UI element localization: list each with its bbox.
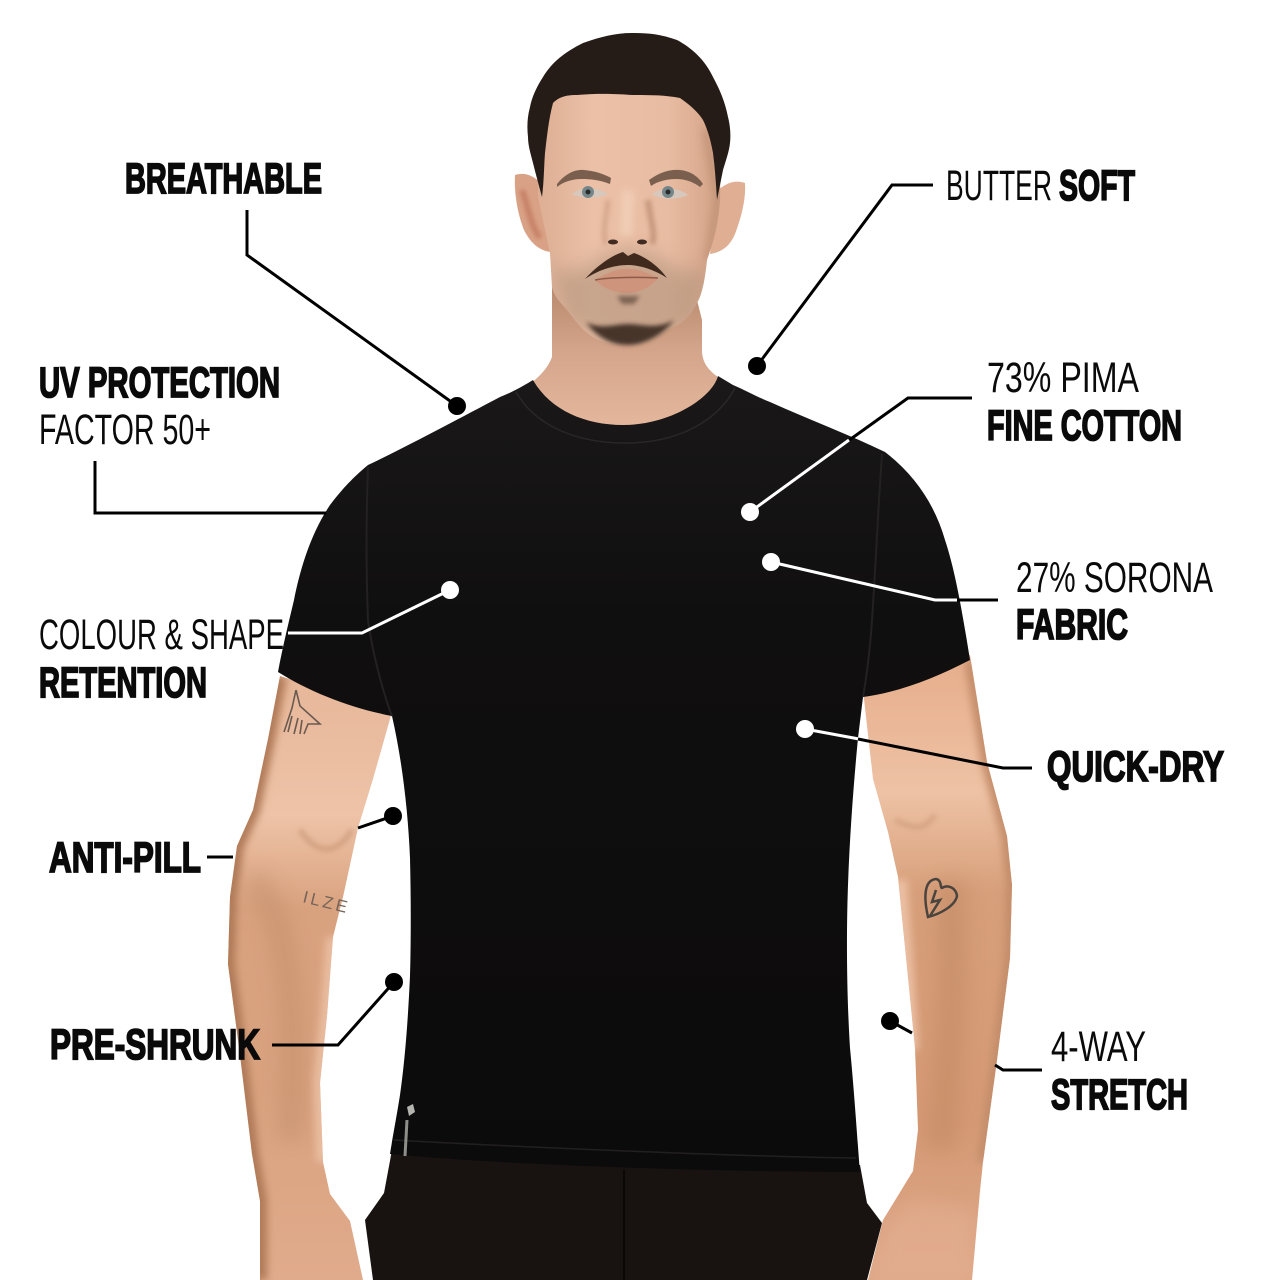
pants <box>365 1150 882 1280</box>
man photo illustration <box>220 33 1020 1280</box>
callout: sorona fabric: FABRIC <box>1016 601 1128 649</box>
callout: anti-pill: ANTI-PILL <box>49 834 201 882</box>
right arm <box>860 655 1020 1280</box>
hair <box>527 33 730 200</box>
eyebrows <box>557 170 611 187</box>
ears <box>515 174 550 252</box>
nose highlight <box>626 190 628 236</box>
tattoo: hand <box>284 690 320 734</box>
callout: sorona fabric <box>762 553 1213 649</box>
callout: UV protection <box>39 359 326 513</box>
callout: pre-shrunk: PRE-SHRUNK <box>50 1021 260 1069</box>
t-shirt <box>278 376 970 1172</box>
callout: colour and shape retention: COLOUR & SHAPE <box>39 611 284 659</box>
callout: anti-pill <box>49 807 402 882</box>
callout: UV protection: FACTOR 50+ <box>39 406 211 454</box>
soul patch <box>617 296 640 304</box>
collar rib <box>516 388 735 443</box>
callout: colour and shape retention: RETENTION <box>39 659 207 707</box>
hem logo tag <box>405 1104 415 1156</box>
sleeve seams <box>366 454 882 716</box>
callout: pima cotton: FINE COTTON <box>987 402 1182 450</box>
moustache <box>585 252 667 279</box>
temple shading <box>706 130 718 260</box>
hem stitching <box>394 1140 856 1158</box>
callout: UV protection: UV PROTECTION <box>39 359 280 407</box>
callout: butter soft <box>748 162 1135 375</box>
lips <box>595 269 658 293</box>
callout: 4-way stretch: STRETCH <box>1051 1071 1188 1119</box>
nostrils <box>608 240 647 244</box>
tattoo: broken heart <box>925 879 957 917</box>
goatee <box>586 320 674 345</box>
face <box>538 94 720 344</box>
callout: 4-way stretch: 4-WAY <box>1051 1023 1146 1071</box>
callout: breathable <box>125 155 466 415</box>
callout: breathable: BREATHABLE <box>125 155 322 203</box>
tattoo: ILZE: ILZE <box>301 887 352 917</box>
callout: pre-shrunk <box>50 973 403 1069</box>
callout: 4-way stretch <box>881 1012 1188 1119</box>
eyes <box>572 186 688 199</box>
callout: pima cotton <box>741 354 1182 521</box>
callout: colour and shape retention <box>39 581 459 707</box>
left arm <box>228 676 391 1280</box>
callout: butter soft: BUTTER <box>946 162 1052 210</box>
stubble shading <box>552 244 706 345</box>
callout: quick-dry <box>796 720 1224 791</box>
neck <box>530 287 725 430</box>
callout: butter soft: SOFT <box>1059 162 1135 210</box>
callout: pima cotton: 73% PIMA <box>987 354 1139 402</box>
